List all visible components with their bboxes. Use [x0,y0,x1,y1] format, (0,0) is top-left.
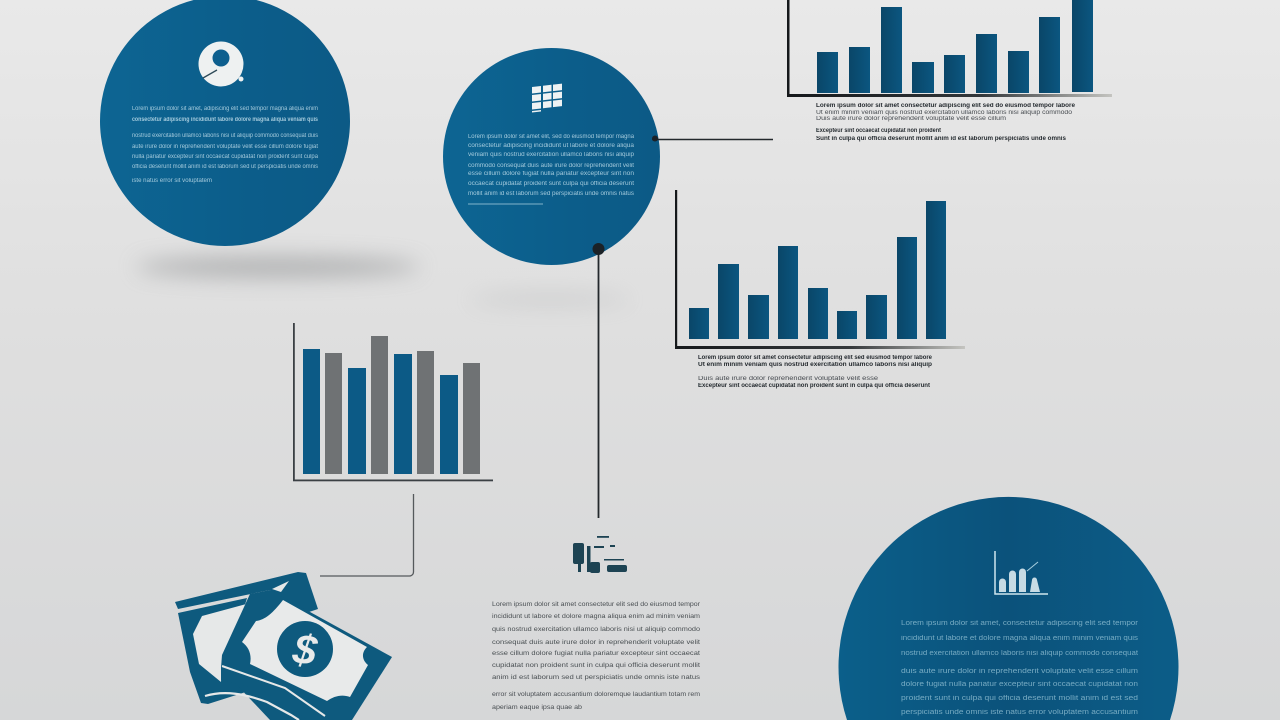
panel: centre circle [443,48,660,265]
text block: circle one copy: nulla pariatur excepteur sint occaecat cupidatat non proident sunt culpa [132,154,319,160]
text block: top right chart caption: Ut enim minim veniam quis nostrud exercitation ullamco laboris nisi aliquip commodo [816,110,1073,116]
text block: centre circle copy: veniam quis nostrud exercitation ullamco laboris nisi aliquip [468,152,635,158]
text block: centre circle copy: esse cillum dolore fugiat nulla pariatur excepteur sint non [468,171,634,177]
text block: middle chart caption: Lorem ipsum dolor sit amet consectetur adipiscing elit sed eiusmod tempor labore [698,355,933,361]
text block: top right chart caption: Lorem ipsum dolor sit amet consectetur adipiscing elit sed do eiusmod tempor labore [816,103,1076,109]
text block: bottom centre copy: anim id est laborum sed ut perspiciatis unde omnis iste natus [492,674,701,681]
text block: circle one copy: consectetur adipiscing incididunt labore dolore magna aliqua veniam quis [132,117,319,123]
connector: centre circle to bottom text [592,243,604,518]
panel: bottom right circle [838,497,1178,720]
text block: centre circle copy [468,134,635,197]
text block: circle one copy: aute irure dolor in reprehenderit voluptate velit esse cillum dolore fugiat [132,144,318,150]
text block: middle chart caption [698,355,933,389]
text block: circle one copy: officia deserunt mollit anim id est laborum sed ut perspiciatis unde omnis [132,164,318,170]
text block: bottom centre copy [492,601,701,711]
dollar sign: $ [289,624,320,674]
second circle shadow [470,293,630,305]
text block: bottom centre copy: consequat duis aute irure dolor in reprehenderit voluptate velit [492,639,700,646]
circle shadow [136,257,420,277]
bar chart: middle [675,190,965,349]
text block: centre circle copy: commodo consequat duis aute irure dolor reprehenderit velit [468,163,634,169]
text block: bottom right circle copy: Lorem ipsum dolor sit amet, consectetur adipiscing elit sed tempor [901,620,1139,627]
back bill [175,572,318,704]
connector: left chart to money icon [320,494,414,576]
bar chart: top right [787,0,1112,97]
icon: magnifier bubble [198,42,244,86]
text block: top right chart caption [816,103,1076,142]
text block: middle chart caption: Duis aute irure dolor reprehenderit voluptate velit esse [698,376,879,382]
text block: bottom centre copy: aperiam eaque ipsa quae ab [492,704,582,711]
text block: bottom right circle copy: duis aute irure dolor in reprehenderit voluptate velit esse cillum [901,668,1138,675]
text block: middle chart caption: Ut enim minim veniam quis nostrud exercitation ullamco laboris nisi aliquip [698,362,932,368]
text block: bottom centre copy: esse cillum dolore fugiat nulla pariatur excepteur sint occaecat [492,650,700,657]
text block: bottom centre copy: incididunt ut labore et dolore magna aliqua enim ad minim veniam [492,613,700,620]
text block: circle one copy [132,106,319,184]
text block: top right chart caption: Duis aute irure dolor reprehenderit voluptate velit esse cillum [816,116,1006,122]
text block: top right chart caption: Sunt in culpa qui officia deserunt mollit anim id est laborum perspiciatis unde omnis [816,136,1067,142]
icon: money bills [175,572,392,720]
icon: small chart [995,551,1048,594]
text block: bottom centre copy: cupidatat non proident sunt in culpa qui officia deserunt mollit [492,662,700,669]
front bill [205,590,392,720]
text block: circle one copy: Lorem ipsum dolor sit amet, adipiscing elit sed tempor magna aliqua enim [132,106,318,112]
text block: centre circle copy: consectetur adipiscing incididunt ut labore et dolore aliqua [468,143,635,149]
text block: bottom centre copy: Lorem ipsum dolor sit amet consectetur elit sed do eiusmod tempor [492,601,701,608]
text block: bottom right circle copy: nostrud exercitation ullamco laboris nisi aliquip commodo consequat [901,650,1138,657]
bar chart: left grouped bars [293,323,493,481]
text block: bottom centre copy: quis nostrud exercitation ullamco laboris nisi ut aliquip commodo [492,626,700,633]
text block: centre circle copy: Lorem ipsum dolor sit amet elit, sed do eiusmod tempor magna [468,134,635,140]
text block: centre circle copy: mollit anim id est laborum sed perspiciatis unde omnis natus [468,191,634,197]
icon: tools cluster [573,536,627,573]
text block: circle one copy: iste natus error sit voluptatem [132,178,212,184]
icon: table grid [532,84,562,112]
text block: circle one copy: nostrud exercitation ullamco laboris nisi ut aliquip commodo consequat duis [132,133,318,139]
text block: bottom centre copy: error sit voluptatem accusantium doloremque laudantium totam rem [492,691,700,698]
text block: bottom right circle copy: incididunt ut labore et dolore magna aliqua enim minim veniam quis [901,635,1139,642]
text block: centre circle copy: occaecat cupidatat proident sunt culpa qui officia deserunt [468,181,634,187]
text block: bottom right circle copy: dolore fugiat nulla pariatur excepteur sint occaecat cupidatat non [901,681,1138,688]
panel: top-left circle [100,0,350,246]
text block: top right chart caption: Excepteur sint occaecat cupidatat non proident [816,128,941,134]
text block: bottom right circle copy: perspiciatis unde omnis iste natus error voluptatem accusantium [901,709,1138,716]
text block: middle chart caption: Excepteur sint occaecat cupidatat non proident sunt in culpa qui officia deserunt [698,383,930,389]
text block: bottom right circle copy [901,620,1139,716]
text block: bottom right circle copy: proident sunt in culpa qui officia deserunt mollit anim id est sed [901,695,1138,702]
connector: circle to right chart [652,136,773,142]
